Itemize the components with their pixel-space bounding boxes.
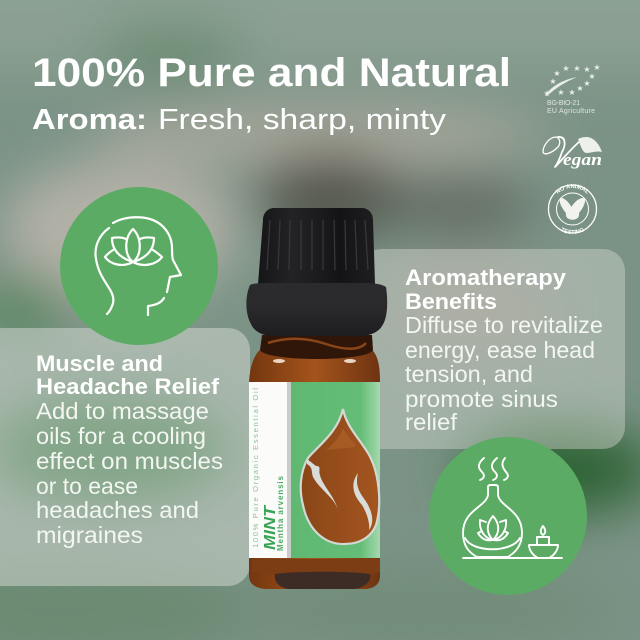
label: oil drop emblem: [301, 409, 379, 544]
text block: muscle and headache relief: Headache Relief: [36, 374, 220, 399]
text block: aromatherapy benefits: relief: [405, 409, 458, 435]
label text: MINT: [262, 504, 279, 550]
label: [249, 382, 380, 558]
icon: EU organic leaf certification: ★: [593, 63, 601, 72]
bottle: [246, 208, 387, 589]
icon: EU organic leaf certification: ★: [573, 64, 581, 73]
icon: vegan logo: [543, 137, 602, 169]
label text: [251, 388, 285, 551]
cap: [258, 208, 375, 284]
title: 100% Pure and Natural: [32, 51, 511, 95]
icon: no animal testing badge: TESTING: [562, 227, 584, 234]
text block: muscle and headache relief: or to ease: [36, 473, 138, 499]
label: white strip: [249, 382, 287, 558]
text block: muscle and headache relief: effect on muscles: [36, 448, 223, 474]
text block: aromatherapy benefits: Benefits: [405, 289, 497, 314]
icon: EU organic leaf certification: [543, 63, 601, 115]
text block: muscle and headache relief: migraines: [36, 522, 143, 548]
text block: aromatherapy benefits: Diffuse to revitalize: [405, 312, 603, 338]
text block: muscle and headache relief: Muscle and: [36, 351, 163, 376]
subtitle: aroma: Aroma:: [32, 104, 147, 136]
label text: Mentha arvensis: [276, 475, 285, 551]
label text: 100% Pure Organic Essential Oil: [251, 388, 260, 548]
text block: muscle and headache relief: [36, 351, 223, 548]
subtitle: aroma: [32, 104, 447, 136]
text block: aromatherapy benefits: energy, ease head: [405, 337, 595, 363]
text block: muscle and headache relief: Add to massage: [36, 398, 209, 424]
icon: EU organic leaf certification: ★: [549, 77, 557, 86]
icon: EU organic leaf certification: ★: [588, 72, 596, 81]
panel: aromatherapy benefits: [360, 249, 625, 449]
text block: aromatherapy benefits: tension, and: [405, 361, 533, 387]
icon: no animal testing badge: NO ANIMAL: [556, 184, 588, 194]
icon circle: aroma diffuser: [429, 437, 587, 595]
bottle neck: [260, 335, 373, 359]
icon: EU organic leaf certification: ★: [583, 65, 591, 74]
panel: muscle and headache relief: [0, 328, 250, 586]
text block: muscle and headache relief: oils for a cooling: [36, 423, 206, 449]
icon: EU organic leaf certification: ★: [553, 69, 561, 78]
icon: EU organic leaf certification: ★: [557, 88, 565, 97]
icon circle: head with lotus: [60, 187, 218, 345]
icon: EU organic leaf certification: BG-BIO-21: [547, 100, 580, 107]
icon: no animal testing badge: [548, 184, 598, 234]
subtitle: aroma: Fresh, sharp, minty: [158, 104, 447, 136]
icon: EU organic leaf certification: ★: [583, 79, 591, 88]
text block: aromatherapy benefits: Aromatherapy: [405, 265, 567, 290]
icon: EU organic leaf certification: ★: [568, 88, 576, 97]
icon: EU organic leaf certification: EU Agriculture: [547, 108, 595, 115]
text block: aromatherapy benefits: promote sinus: [405, 386, 558, 412]
icon: EU organic leaf certification: ★: [562, 64, 570, 73]
icon: EU organic leaf certification: ★: [576, 84, 584, 93]
text block: aromatherapy benefits: [405, 265, 603, 435]
text block: muscle and headache relief: headaches and: [36, 497, 199, 523]
dropper collar: [246, 283, 387, 336]
icon: vegan logo: egan: [563, 150, 602, 169]
bottle glass: [249, 348, 380, 589]
icon: EU organic leaf certification: ★: [543, 89, 551, 98]
